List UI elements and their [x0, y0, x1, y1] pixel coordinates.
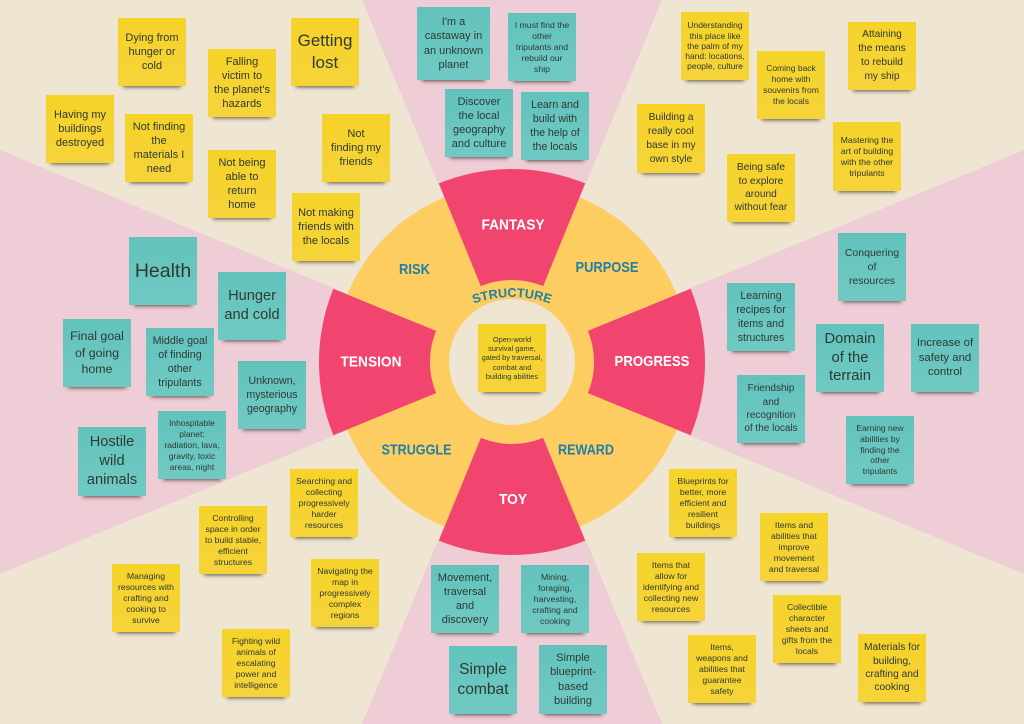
note: new abilities: abilities by: [860, 434, 900, 444]
note: conquering: Conquering: [845, 247, 899, 259]
panel: toy notes: [431, 565, 607, 718]
note: discover: the local: [458, 110, 499, 122]
note: return home: home: [228, 199, 256, 211]
center note: game summary: survival game,: [488, 344, 536, 353]
note: materials: [125, 114, 193, 182]
note: controlling space: structures: [214, 556, 252, 566]
note: new abilities: [846, 416, 914, 484]
note: understanding: this place like: [689, 31, 740, 41]
note: being safe: Being safe: [737, 162, 785, 173]
note: identifying items: Items that: [652, 560, 690, 570]
note: hostile animals: wild: [99, 453, 125, 469]
note: falling victim: victim to: [222, 70, 262, 82]
note: understanding: hand: locations,: [685, 51, 745, 61]
note: materials: building,: [873, 656, 911, 667]
note: simple combat: combat: [457, 681, 509, 698]
note: recipes: items and: [738, 318, 784, 330]
note: find tripulants: rebuild our: [521, 52, 563, 62]
note: blueprint building: based: [558, 680, 588, 692]
note: being safe: to explore: [739, 176, 783, 187]
note: locals: friends with: [298, 221, 354, 233]
note: health: Health: [135, 260, 191, 282]
note: inhospitable: gravity, toxic: [169, 450, 215, 460]
note: attaining: to rebuild: [861, 57, 903, 68]
label: reward: REWARD: [558, 442, 614, 458]
note: return home: return: [228, 185, 256, 197]
note: blueprints: buildings: [686, 520, 720, 530]
note: falling victim: Falling: [226, 56, 258, 68]
note: navigating: Navigating the: [317, 566, 373, 576]
note: hunger and cold: Hunger: [228, 288, 276, 304]
note: hunger and cold: and cold: [224, 307, 280, 323]
note: mining: [521, 565, 589, 633]
label: toy: TOY: [499, 491, 527, 508]
note: understanding: the palm of my: [687, 41, 743, 51]
note: controlling space: [199, 506, 267, 574]
note: movement: Movement,: [438, 572, 492, 584]
note: navigating: map in: [332, 576, 358, 586]
note: blueprint building: Simple: [556, 652, 590, 664]
note: materials: need: [147, 163, 171, 175]
note: mastering: art of building: [841, 146, 893, 156]
note: recipes: [727, 283, 795, 351]
note: attaining: my ship: [864, 71, 900, 82]
note: souvenirs: home with: [772, 74, 810, 84]
note: searching: resources: [305, 520, 343, 530]
note: find tripulants: [508, 13, 576, 81]
note: simple combat: Simple: [459, 660, 507, 678]
note: locals: Not making: [298, 207, 354, 219]
note: return home: able to: [225, 171, 259, 183]
note: unknown geography: [238, 361, 306, 429]
note: middle goal: of finding: [158, 349, 202, 361]
note: domain: terrain: [829, 368, 871, 384]
note: controlling space: efficient: [218, 546, 248, 556]
note: getting lost: [291, 18, 359, 86]
note: blueprints: efficient and: [680, 498, 726, 508]
note: safety items: abilities that: [699, 664, 745, 674]
note: friends: finding my: [331, 142, 381, 154]
note: new abilities: tripulants: [863, 466, 897, 476]
label: risk: RISK: [399, 261, 430, 278]
note: understanding: Understanding: [687, 20, 743, 30]
note: locals: [292, 193, 360, 261]
note: controlling space: Controlling: [212, 512, 254, 522]
note: castaway: planet: [438, 59, 468, 71]
center note: game summary: building abilities: [486, 372, 538, 381]
note: identifying items: [637, 553, 705, 621]
note: new abilities: Earning new: [856, 423, 904, 433]
center note: game summary: gated by traversal,: [482, 353, 542, 362]
panel: struggle notes: [112, 469, 379, 702]
note: learn and build: the help of: [530, 127, 580, 139]
note: being safe: without fear: [735, 202, 787, 213]
note: friends: friends: [339, 156, 372, 168]
note: controlling space: to build stable,: [205, 534, 261, 544]
note: dying from hunger: [118, 18, 186, 86]
note: managing: crafting and: [123, 592, 169, 602]
note: movement items: Items and: [775, 520, 813, 530]
note: final goal: [63, 319, 131, 387]
note: materials: cooking: [874, 682, 910, 693]
note: movement items: improve: [779, 542, 809, 552]
note: mining: Mining,: [541, 572, 569, 582]
note: attaining: Attaining: [862, 29, 902, 40]
note: movement items: and traversal: [769, 564, 819, 574]
note: being safe: around: [745, 189, 777, 200]
note: hostile animals: animals: [87, 472, 137, 488]
note: searching: [290, 469, 358, 537]
note: mining: cooking: [540, 616, 570, 626]
note: safety items: [688, 635, 756, 703]
note: cool base: [637, 104, 705, 173]
panel: progress notes: [727, 233, 979, 488]
label: struggle: STRUGGLE: [382, 442, 452, 458]
note: safety items: Items,: [710, 642, 734, 652]
note: cool base: own style: [650, 154, 692, 164]
note: fighting: power and: [236, 668, 276, 678]
note: searching: harder: [311, 508, 337, 518]
label: fantasy: FANTASY: [482, 216, 544, 234]
note: friendship: recognition: [747, 410, 795, 421]
note: find tripulants: tripulants and: [516, 42, 568, 52]
note: mastering: Mastering the: [841, 134, 893, 144]
note: safety items: guarantee: [702, 674, 742, 684]
note: managing: resources with: [118, 582, 174, 592]
note: blueprint building: building: [554, 695, 592, 707]
note: unknown geography: mysterious: [246, 389, 298, 401]
note: falling victim: [208, 49, 276, 117]
note: return home: [208, 150, 276, 218]
label: purpose: PURPOSE: [576, 259, 638, 276]
note: friendship: and: [763, 397, 779, 408]
note: discover: geography: [453, 124, 505, 136]
note: navigating: complex: [329, 598, 361, 608]
note: recipes: Learning: [740, 290, 782, 302]
panel: tension notes: [63, 237, 306, 500]
note: controlling space: space in order: [205, 524, 261, 534]
panel: purpose notes: [637, 12, 916, 226]
note: materials: [858, 634, 926, 702]
note: safety items: weapons and: [696, 652, 748, 662]
note: getting lost: lost: [312, 53, 338, 72]
note: friends: Not: [347, 128, 365, 140]
note: discover: and culture: [452, 138, 506, 150]
note: managing: cooking to: [126, 604, 166, 614]
note: safety and control: Increase of: [917, 337, 973, 349]
note: castaway: [417, 7, 490, 80]
label: tension: TENSION: [340, 354, 402, 370]
center note: game summary: Open-world: [493, 335, 531, 344]
note: collectibles: Collectible: [787, 602, 827, 612]
note: recipes: structures: [738, 332, 784, 344]
label: structure curved heading: STRUCTURE: [472, 288, 552, 304]
note: searching: collecting: [306, 486, 342, 496]
note: dying from hunger: Dying from: [125, 32, 179, 44]
note: learn and build: build with: [533, 113, 577, 125]
note: discover: Discover: [458, 96, 500, 108]
note: simple combat: [449, 646, 517, 714]
panel: reward notes: [637, 469, 926, 708]
note: dying from hunger: hunger or: [128, 46, 176, 58]
note: domain: of the: [831, 350, 869, 366]
note: dying from hunger: cold: [142, 60, 162, 72]
note: hostile animals: [78, 427, 146, 496]
note: final goal: Final goal: [70, 329, 124, 343]
note: final goal: of going: [75, 346, 119, 360]
note: movement: traversal: [444, 586, 486, 598]
note: souvenirs: Coming back: [766, 63, 816, 73]
note: mastering: tripulants: [849, 168, 885, 178]
note: inhospitable: planet:: [179, 428, 205, 438]
note: understanding: people, culture: [687, 61, 743, 71]
note: find tripulants: other: [532, 30, 552, 40]
note: castaway: castaway in: [425, 30, 482, 42]
note: being safe: [727, 154, 795, 222]
note: buildings destroyed: destroyed: [56, 137, 104, 149]
note: getting lost: Getting: [298, 31, 352, 50]
note: movement: [431, 565, 499, 633]
note: hostile animals: Hostile: [90, 434, 134, 450]
note: identifying items: resources: [652, 604, 690, 614]
note: fighting: [222, 629, 290, 697]
note: cool base: Building a: [649, 112, 693, 122]
note: cool base: base in my: [646, 140, 696, 150]
note: blueprint building: [539, 645, 607, 714]
note: souvenirs: the locals: [773, 96, 809, 106]
note: middle goal: Middle goal: [153, 335, 207, 347]
note: inhospitable: areas, night: [170, 462, 214, 472]
center note: game summary: combat and: [493, 363, 531, 372]
note: conquering: [838, 233, 906, 301]
note: final goal: home: [81, 362, 112, 376]
note: managing: survive: [132, 614, 160, 624]
note: middle goal: other: [168, 363, 192, 375]
note: friendship: Friendship: [748, 383, 794, 394]
note: safety and control: [911, 324, 979, 392]
note: navigating: regions: [331, 610, 359, 620]
note: blueprints: [669, 469, 737, 537]
note: cool base: really cool: [648, 126, 694, 136]
note: falling victim: the planet's: [214, 84, 270, 96]
panel: fantasy notes: [417, 7, 589, 164]
note: fighting: animals of: [236, 646, 276, 656]
note: safety and control: safety and: [919, 352, 971, 364]
note: buildings destroyed: Having my: [54, 109, 106, 121]
note: blueprint building: blueprint-: [550, 666, 596, 678]
note: collectibles: gifts from the: [782, 634, 832, 644]
note: learn and build: Learn and: [531, 99, 579, 111]
note: attaining: [848, 22, 916, 90]
note: movement: discovery: [442, 614, 488, 626]
note: inhospitable: Inhospitable: [169, 418, 215, 428]
note: attaining: the means: [858, 43, 906, 54]
note: buildings destroyed: [46, 95, 114, 163]
note: return home: Not being: [218, 157, 266, 169]
note: domain: Domain: [824, 331, 876, 347]
note: middle goal: [146, 328, 214, 396]
note: castaway: an unknown: [424, 44, 483, 56]
panel: risk notes: [46, 18, 390, 266]
note: materials: Materials for: [864, 642, 920, 653]
note: conquering: of: [868, 261, 876, 273]
note: inhospitable: [158, 411, 226, 479]
note: fighting: Fighting wild: [232, 636, 280, 646]
note: castaway: I'm a: [442, 16, 465, 28]
note: find tripulants: ship: [534, 64, 550, 74]
note: mining: foraging,: [538, 582, 572, 592]
note: learn and build: the locals: [533, 141, 577, 153]
note: conquering: resources: [849, 275, 895, 287]
note: managing: Managing: [127, 570, 165, 580]
note: collectibles: [773, 595, 841, 663]
note: navigating: [311, 559, 379, 627]
note: movement: and: [456, 600, 474, 612]
note: collectibles: character: [789, 612, 825, 622]
note: middle goal: tripulants: [158, 377, 202, 389]
note: movement items: [760, 513, 828, 581]
note: unknown geography: Unknown,: [248, 375, 296, 387]
note: movement items: abilities that: [771, 530, 817, 540]
note: materials: the: [151, 135, 167, 147]
note: identifying items: allow for: [655, 570, 687, 580]
center note: game summary: [478, 324, 546, 392]
note: falling victim: hazards: [222, 98, 262, 110]
note: managing: [112, 564, 180, 632]
note: buildings destroyed: buildings: [58, 123, 102, 135]
note: blueprints: Blueprints for: [677, 476, 729, 486]
note: materials: crafting and: [865, 669, 919, 680]
note: hunger and cold: [218, 272, 286, 340]
note: find tripulants: I must find the: [515, 20, 569, 30]
note: souvenirs: [757, 51, 825, 119]
note: learn and build: [521, 92, 589, 160]
note: new abilities: other: [870, 455, 890, 465]
note: mastering: with the other: [841, 156, 893, 166]
note: identifying items: collecting new: [644, 592, 698, 602]
note: friendship: [737, 375, 805, 443]
note: identifying items: identifying and: [643, 582, 699, 592]
note: safety items: safety: [710, 686, 734, 696]
note: domain: [816, 324, 884, 392]
note: blueprints: better, more: [680, 486, 726, 496]
note: safety and control: control: [928, 366, 962, 378]
note: discover: [445, 89, 513, 157]
note: searching: Searching and: [296, 476, 352, 486]
note: inhospitable: radiation, lava,: [164, 440, 220, 450]
note: mining: harvesting,: [534, 594, 576, 604]
note: collectibles: locals: [796, 646, 818, 656]
note: health: [129, 237, 197, 305]
note: navigating: progressively: [319, 588, 371, 598]
note: collectibles: sheets and: [786, 624, 828, 634]
note: searching: progressively: [298, 498, 350, 508]
note: movement items: movement: [774, 552, 814, 562]
note: fighting: escalating: [236, 658, 276, 668]
note: locals: the locals: [303, 235, 349, 247]
note: understanding: [681, 12, 749, 80]
note: fighting: intelligence: [234, 680, 278, 690]
note: materials: materials I: [134, 149, 184, 161]
note: new abilities: finding the: [860, 445, 900, 455]
note: mastering: [833, 122, 901, 191]
label: progress: PROGRESS: [614, 353, 690, 370]
note: blueprints: resilient: [688, 508, 718, 518]
note: materials: Not finding: [133, 121, 185, 133]
note: friendship: of the locals: [744, 423, 798, 434]
note: recipes: recipes for: [736, 304, 786, 316]
note: unknown geography: geography: [247, 403, 297, 415]
note: friends: [322, 114, 390, 182]
note: mining: crafting and: [532, 604, 578, 614]
note: souvenirs: souvenirs from: [763, 85, 819, 95]
